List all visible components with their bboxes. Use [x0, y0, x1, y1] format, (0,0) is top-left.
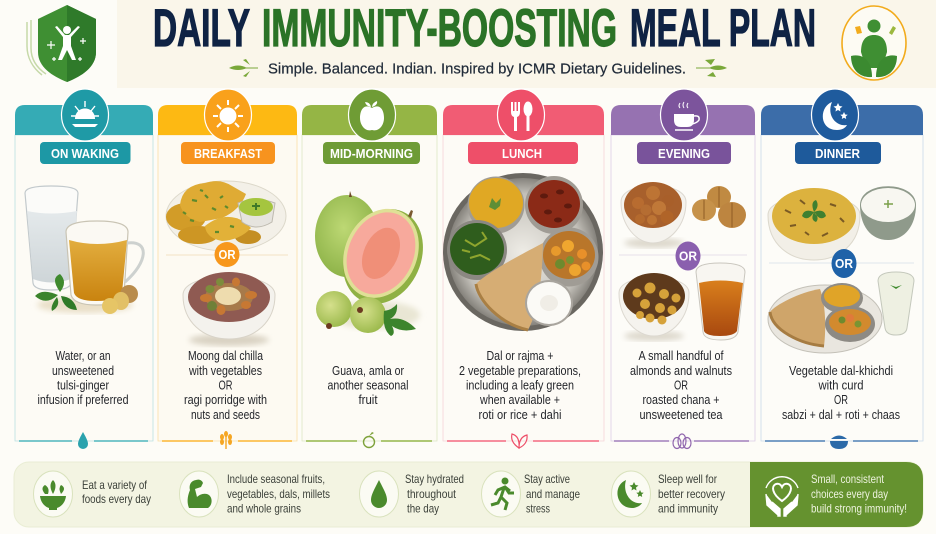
- icon: wheat footer: [162, 431, 292, 449]
- tip: stay active: [482, 471, 580, 517]
- illustration: water glass and tulsi-ginger tea: [25, 186, 143, 314]
- header bar: [302, 105, 437, 135]
- icon: apple footer: [306, 432, 432, 448]
- tip: seasonal foods: and whole grains: [227, 502, 301, 516]
- icon: fork and spoon: [498, 89, 544, 141]
- or badge: OR: [835, 256, 854, 271]
- or badge: [676, 242, 700, 270]
- header bar: [761, 105, 923, 135]
- label pill: [323, 142, 420, 164]
- tip: stay active: and manage: [526, 487, 580, 501]
- tip: sleep: [612, 471, 725, 517]
- panel: breakfast: [158, 89, 297, 449]
- meal description: Moong dal chilla: [188, 349, 263, 363]
- meal description: 2 vegetable preparations,: [459, 364, 581, 378]
- meal description: nuts and seeds: [191, 408, 260, 422]
- panel: mid-morning: [302, 89, 438, 448]
- meal description: with vegetables: [188, 364, 262, 378]
- tip: sleep: Sleep well for: [658, 472, 717, 486]
- meal description: OR: [834, 393, 848, 407]
- icon: water drop footer: [19, 432, 148, 449]
- meal description: [328, 364, 408, 407]
- meal description: Water, or an: [56, 349, 111, 363]
- illustration: dal-khichdi and curd: [768, 186, 916, 260]
- meal description: OR: [674, 378, 688, 392]
- label pill: MID-MORNING: [330, 146, 413, 161]
- meal description: Dal or rajma +: [486, 349, 554, 363]
- subtitle: Simple. Balanced. Indian. Inspired by ICMR Dietary Guidelines.: [268, 60, 686, 78]
- icon: leaf footer: [447, 434, 599, 448]
- callout: green message: build strong immunity!: [811, 502, 907, 516]
- callout: green message: [750, 462, 923, 527]
- callout: green message: choices every day: [811, 487, 888, 501]
- label pill: [181, 142, 275, 164]
- or badge: OR: [679, 248, 698, 264]
- or badge: OR: [218, 247, 236, 262]
- divider: [166, 254, 288, 256]
- meal description: sabzi + dal + roti + chaas: [782, 408, 900, 422]
- icon: sun: [204, 89, 252, 141]
- meal description: Guava, amla or: [332, 364, 404, 378]
- tip: hydration: [360, 471, 464, 517]
- meal description: almonds and walnuts: [630, 364, 732, 378]
- icon: person with leaves: [842, 6, 906, 80]
- tip: seasonal foods: vegetables, dals, millets: [227, 487, 330, 501]
- meal description: [630, 349, 732, 422]
- icon: left sprig: [229, 59, 258, 77]
- tip: seasonal foods: [180, 471, 330, 517]
- meal description: [782, 364, 900, 422]
- label pill: BREAKFAST: [194, 146, 262, 161]
- icon: tea cup: [660, 89, 708, 141]
- label pill: EVENING: [658, 146, 710, 161]
- icon: apple: [348, 89, 396, 141]
- label pill: LUNCH: [502, 146, 542, 161]
- icon: nuts footer: [614, 434, 749, 448]
- meal description: unsweetened: [52, 364, 114, 378]
- label pill: DINNER: [815, 146, 861, 161]
- meal description: A small handful of: [638, 349, 724, 363]
- meal description: tulsi-ginger: [57, 378, 109, 392]
- illustration: guava and amla: [315, 191, 438, 336]
- panel: evening: [611, 89, 755, 448]
- tip: hydration: throughout: [407, 487, 457, 501]
- divider: [619, 254, 747, 256]
- illustration: moong dal chilla plate: [166, 181, 286, 251]
- or badge: [832, 249, 856, 278]
- panel: on waking: [15, 89, 153, 449]
- meal description: when available +: [479, 393, 560, 407]
- tip: hydration: the day: [407, 502, 439, 516]
- illustration: roasted chana and tea: [619, 263, 745, 341]
- meal description: fruit: [358, 393, 378, 407]
- label pill: [637, 142, 731, 164]
- tip: sleep: and immunity: [658, 502, 718, 516]
- tip: variety: [34, 471, 151, 517]
- icon: heart in hands: [766, 477, 798, 516]
- title: DAILY: [153, 0, 250, 58]
- meal description: ragi porridge with: [184, 393, 267, 407]
- meal description: roti or rice + dahi: [478, 408, 562, 422]
- icon: bowl footer: [765, 436, 918, 449]
- tip: stay active: Stay active: [524, 472, 570, 486]
- illustration: thali: [443, 173, 603, 331]
- illustration: sabzi, dal, roti and chaas: [768, 272, 914, 353]
- icon: sunrise: [62, 89, 108, 141]
- or badge: [214, 242, 240, 267]
- illustration: ragi porridge bowl: [183, 272, 275, 346]
- title: IMMUNITY-BOOSTING: [262, 0, 617, 58]
- header bar: [15, 105, 153, 135]
- icon: moon and stars: [812, 89, 858, 141]
- meal description: including a leafy green: [466, 378, 574, 392]
- header bar: [443, 105, 604, 135]
- icon: shield with figure: [27, 5, 96, 82]
- panel: tips strip: [14, 462, 923, 527]
- label pill: [795, 142, 881, 164]
- meal description: with curd: [818, 378, 864, 392]
- meal description: another seasonal: [328, 378, 408, 392]
- header bar: [158, 105, 297, 135]
- meal description: infusion if preferred: [38, 393, 129, 407]
- meal description: Vegetable dal-khichdi: [789, 364, 893, 378]
- icon: right sprig: [696, 59, 727, 77]
- tip: stay active: stress: [526, 502, 550, 516]
- tip: hydration: Stay hydrated: [405, 472, 464, 486]
- illustration: almonds and walnuts: [621, 182, 746, 248]
- tip: variety: Eat a variety of: [82, 478, 148, 492]
- meal description: [459, 349, 581, 422]
- label pill: ON WAKING: [51, 146, 119, 161]
- divider: [769, 262, 914, 264]
- meal description: roasted chana +: [642, 393, 720, 407]
- tip: variety: foods every day: [82, 492, 151, 506]
- meal description: [38, 349, 129, 407]
- panel: lunch: [443, 89, 604, 448]
- label pill: [468, 142, 578, 164]
- tip: seasonal foods: Include seasonal fruits,: [227, 472, 325, 486]
- meal description: OR: [218, 378, 232, 392]
- panel: dinner: [761, 89, 923, 449]
- header band: [117, 0, 936, 88]
- tip: sleep: better recovery: [658, 487, 725, 501]
- header bar: [611, 105, 755, 135]
- meal description: unsweetened tea: [640, 408, 723, 422]
- label pill: [40, 142, 130, 164]
- callout: green message: Small, consistent: [811, 472, 885, 486]
- meal description: [184, 349, 267, 422]
- title: MEAL PLAN: [630, 0, 816, 58]
